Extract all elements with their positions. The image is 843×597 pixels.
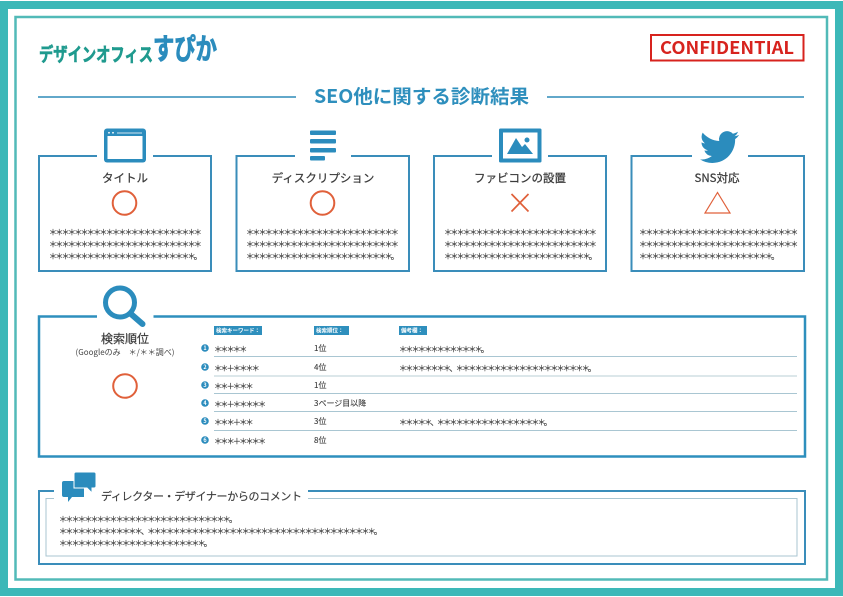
- row 2: 2: [203, 363, 207, 371]
- panel: description check: [236, 130, 409, 271]
- heading: 検索順位: [101, 330, 149, 347]
- row 1: 1位: [314, 343, 326, 354]
- confidential stamp: CONFIDENTIAL: [660, 35, 794, 60]
- logo: [39, 26, 217, 68]
- text block: ＊＊＊＊＊＊＊＊＊＊＊＊＊＊＊＊＊＊＊＊＊＊＊。: [444, 251, 595, 262]
- table headers: [214, 326, 427, 335]
- row 6: [201, 435, 326, 447]
- row 6: 8位: [314, 435, 326, 446]
- text block: [246, 227, 398, 262]
- table headers: 検索キーワード：: [216, 326, 260, 334]
- row 3: 1位: [314, 380, 326, 391]
- logo: デザインオフィス: [39, 40, 153, 67]
- table row dividers: [214, 356, 797, 430]
- icon: circle rating: [113, 191, 136, 215]
- heading: ファビコンの設置: [474, 170, 566, 186]
- row 5: 5: [203, 417, 207, 425]
- row 1: 1: [203, 344, 207, 352]
- row 2: ＊＊＊＊＊＊＊＊、＊＊＊＊＊＊＊＊＊＊＊＊＊＊＊＊＊＊＊＊＊。: [399, 363, 594, 374]
- text block: [49, 227, 201, 262]
- text block: ＊＊＊＊＊＊＊＊＊＊＊＊＊＊＊＊＊＊＊＊＊＊＊。: [246, 251, 397, 262]
- table headers: 検索順位：: [316, 326, 344, 334]
- text block: ＊＊＊＊＊＊＊＊＊＊＊＊＊＊＊＊＊＊＊＊＊＊＊＊＊: [639, 227, 797, 238]
- icon: image: [499, 128, 542, 162]
- heading: タイトル: [102, 170, 148, 186]
- icon: browser window: [104, 128, 146, 162]
- text block: ＊＊＊＊＊＊＊＊＊＊＊＊＊＊＊＊＊＊＊＊＊＊＊。: [49, 251, 200, 262]
- heading: ディスクリプション: [272, 170, 374, 186]
- panel: SNS check: [632, 131, 804, 271]
- title: SEO他に関する診断結果: [314, 82, 529, 109]
- icon: speech bubbles: [62, 472, 96, 502]
- row 6: ＊＊＊＋＊＊＊＊: [214, 436, 265, 447]
- panel: favicon check: [434, 128, 606, 271]
- row 5: ＊＊＊＋＊＊: [214, 417, 252, 428]
- text block: ＊＊＊＊＊＊＊＊＊＊＊＊＊＊＊＊＊＊＊＊＊＊＊＊: [49, 239, 201, 250]
- row 5: 3位: [314, 416, 326, 427]
- panel: title check: [39, 128, 211, 271]
- icon: magnifier: [106, 288, 142, 324]
- icon: text lines: [310, 130, 336, 160]
- row 1: ＊＊＊＊＊＊＊＊＊＊＊＊＊。: [399, 344, 487, 355]
- row 6: 6: [203, 436, 207, 444]
- text block: ＊＊＊＊＊＊＊＊＊＊＊＊＊＊＊＊＊＊＊＊＊＊＊＊: [444, 227, 596, 238]
- row 4: 4: [203, 399, 207, 407]
- text block: ＊＊＊＊＊＊＊＊＊＊＊＊＊＊＊＊＊＊＊＊＊＊＊＊: [444, 239, 596, 250]
- comment text: ＊＊＊＊＊＊＊＊＊＊＊＊＊、＊＊＊＊＊＊＊＊＊＊＊＊＊＊＊＊＊＊＊＊＊＊＊＊＊＊＊＊＊＊＊＊＊＊＊＊。: [59, 526, 380, 537]
- comment text: ＊＊＊＊＊＊＊＊＊＊＊＊＊＊＊＊＊＊＊＊＊＊＊＊＊＊＊。: [59, 514, 235, 525]
- logo: すぴか: [153, 26, 217, 68]
- row 4: [201, 398, 366, 410]
- icon: circle rating: [113, 374, 137, 398]
- icon: triangle rating: [705, 192, 730, 213]
- row 4: 3ページ目以降: [314, 398, 366, 409]
- panel: search ranking: [39, 288, 805, 456]
- heading: SNS対応: [694, 170, 740, 186]
- icon: cross rating: [512, 194, 528, 212]
- text block: ＊＊＊＊＊＊＊＊＊＊＊＊＊＊＊＊＊＊＊＊＊＊＊＊＊: [639, 239, 797, 250]
- row 3: 3: [203, 381, 207, 389]
- text block: [639, 227, 797, 262]
- row 2: 4位: [314, 362, 326, 373]
- row 4: ＊＊＋＊＊＊＊＊: [214, 399, 265, 410]
- comment text: ＊＊＊＊＊＊＊＊＊＊＊＊＊＊＊＊＊＊＊＊＊＊＊。: [59, 538, 210, 549]
- row 3: [201, 380, 326, 392]
- text block: ＊＊＊＊＊＊＊＊＊＊＊＊＊＊＊＊＊＊＊＊＊。: [639, 251, 778, 262]
- icon: circle rating: [311, 191, 334, 215]
- row 1: [201, 343, 487, 355]
- text block: ＊＊＊＊＊＊＊＊＊＊＊＊＊＊＊＊＊＊＊＊＊＊＊＊: [246, 227, 398, 238]
- text block: ＊＊＊＊＊＊＊＊＊＊＊＊＊＊＊＊＊＊＊＊＊＊＊＊: [246, 239, 398, 250]
- table headers: 備考欄：: [401, 326, 423, 334]
- panel: comment: [39, 472, 805, 564]
- row 3: ＊＊＋＊＊＊: [214, 381, 252, 392]
- text block: [444, 227, 596, 262]
- heading: ディレクター・デザイナーからのコメント: [101, 488, 302, 504]
- row 5: ＊＊＊＊＊、＊＊＊＊＊＊＊＊＊＊＊＊＊＊＊＊＊。: [399, 417, 550, 428]
- row 1: ＊＊＊＊＊: [214, 344, 246, 355]
- row 5: [201, 416, 550, 428]
- icon: bird: [700, 131, 739, 163]
- comment text: [59, 514, 380, 549]
- note: (Googleのみ ＊/＊＊調べ): [76, 347, 174, 358]
- row 2: [201, 362, 594, 374]
- text block: ＊＊＊＊＊＊＊＊＊＊＊＊＊＊＊＊＊＊＊＊＊＊＊＊: [49, 227, 201, 238]
- row 2: ＊＊＋＊＊＊＊: [214, 363, 259, 374]
